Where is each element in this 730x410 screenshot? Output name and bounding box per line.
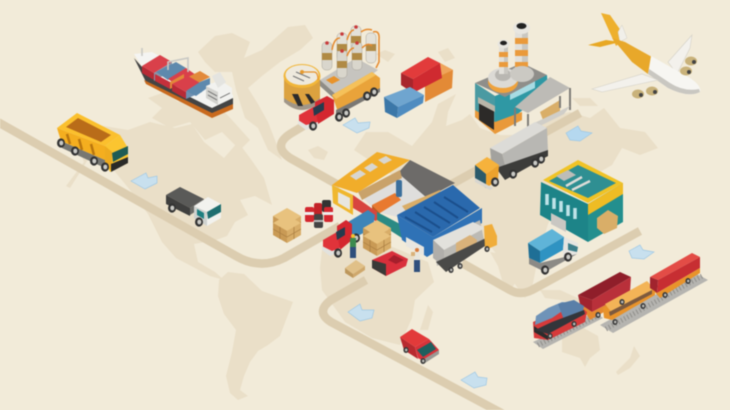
tanker wheels [309, 121, 317, 131]
map: australia [562, 326, 600, 367]
small chimney [499, 46, 508, 74]
road: south east loop [462, 231, 640, 293]
warehouse yellow roof [332, 152, 410, 193]
wheels [334, 248, 342, 258]
building pallets [597, 210, 618, 234]
grey box truck [475, 122, 548, 190]
ship containers [142, 55, 172, 73]
building roof [543, 160, 623, 203]
truck wheels [541, 265, 549, 275]
factory windows [510, 80, 535, 100]
warehouse orange bay [372, 193, 401, 213]
road: west diagonal [0, 121, 340, 264]
trailer end [433, 240, 444, 267]
blue container [384, 87, 424, 107]
blue container body [528, 229, 564, 251]
blue marker arrow 6 [461, 372, 487, 388]
red open wagon [578, 272, 631, 300]
warehouse yellow wall [332, 185, 353, 215]
tank lid [284, 64, 320, 88]
van wheels [403, 347, 409, 353]
blue marker arrow 2 [343, 118, 370, 133]
factory pallets [540, 100, 560, 120]
warehouse open dark roof [398, 160, 455, 198]
building stacked goods [551, 213, 566, 232]
warehouse blue wall [397, 208, 482, 257]
van windows [417, 342, 436, 357]
red truck with blue container at warehouse [322, 210, 375, 258]
truck cab [194, 197, 221, 226]
truck cab and bed [563, 237, 578, 262]
oil storage tank [284, 64, 320, 110]
factory walls [475, 83, 495, 132]
warehouse red wall [353, 195, 377, 222]
dump truck chassis [61, 141, 105, 168]
plane far wing [668, 35, 692, 74]
map: new zealand [616, 346, 640, 375]
factory orange base [475, 110, 522, 134]
dump truck bed [57, 113, 120, 146]
red and black barrels [305, 200, 333, 228]
world map [66, 25, 658, 400]
trailer interior [433, 220, 484, 266]
wheels [448, 267, 454, 273]
factory domes [488, 71, 518, 93]
truck wheels [491, 177, 499, 187]
red cab [337, 220, 352, 250]
second worker [411, 248, 420, 272]
factory [475, 22, 570, 134]
truck cab [475, 157, 499, 174]
red car with boxes [372, 251, 408, 276]
pallets of boxes left [273, 208, 301, 243]
ship superstructure [206, 80, 232, 105]
boxes in trailer [456, 235, 477, 257]
blue marker arrow 1 [131, 173, 157, 189]
tank body [284, 76, 320, 108]
red container wagon [650, 253, 700, 280]
road: south loop [323, 280, 505, 410]
trailer roof [433, 222, 485, 250]
worker in warehouse [396, 180, 402, 197]
truck trailer [490, 122, 547, 154]
blue marker arrow 4 [629, 245, 654, 259]
building left wall [540, 182, 588, 242]
map: africa [320, 240, 434, 345]
steam locomotive [533, 302, 587, 340]
train wheels [547, 333, 553, 339]
road: east diagonal [452, 113, 580, 184]
refinery columns and platform [320, 25, 379, 104]
warehouse stacked shelves [358, 170, 402, 200]
tanker cab [315, 96, 334, 124]
blue marker arrow 5 [348, 304, 374, 321]
blue cargo [348, 210, 375, 240]
warehouse teal wall [377, 212, 402, 238]
ship hull [134, 58, 233, 115]
orange container [425, 63, 453, 102]
map: canadian islands [148, 92, 250, 150]
truck wheels [168, 203, 176, 213]
map: madagascar [420, 305, 433, 330]
open box truck at warehouse [433, 220, 497, 273]
factory dock door [479, 102, 494, 130]
airplane [588, 13, 700, 98]
warehouse blue roof [397, 185, 480, 237]
track right [600, 273, 708, 333]
tanker body [332, 72, 380, 112]
refinery pipes [332, 29, 379, 68]
building right wall [588, 183, 623, 242]
large chimney [515, 32, 528, 70]
map: south america [218, 272, 293, 400]
map: europe and asia [354, 94, 658, 298]
blue marker arrow 3 [566, 126, 592, 141]
factory roof [475, 63, 547, 97]
refinery back columns [322, 26, 376, 78]
teal warehouse building [540, 160, 623, 242]
plane near wing [592, 74, 658, 92]
container ship [134, 48, 233, 118]
van bumper [424, 350, 439, 363]
track left [533, 312, 603, 349]
refinery platform [320, 58, 378, 98]
loading canopy [515, 77, 570, 113]
central warehouse [332, 152, 482, 257]
map: japan and pacific islands [540, 290, 585, 306]
dump truck cab [105, 135, 128, 172]
white flatbed truck [166, 187, 221, 227]
plane tail [601, 13, 626, 46]
shipping roads [0, 113, 640, 410]
tanker truck [298, 72, 380, 131]
ship cranes [142, 48, 188, 72]
orange cab [484, 224, 497, 250]
plane fuselage [612, 38, 652, 74]
road: north loop [281, 125, 340, 186]
map: india and southeast asia [490, 252, 520, 288]
shipping containers [384, 57, 453, 118]
refinery column bands [322, 36, 376, 68]
map: small isle [308, 146, 328, 160]
dump truck wheels [57, 138, 65, 148]
map: greenland and arctic [198, 25, 313, 160]
plane engines [685, 56, 697, 66]
warehouse floor [360, 172, 440, 218]
flatbed cargo [166, 187, 204, 208]
parcels on ground [345, 260, 365, 278]
orange diesel locomotive [603, 282, 655, 320]
map: north america [66, 122, 272, 280]
red delivery van [400, 329, 439, 364]
central pallets of boxes [363, 220, 391, 256]
railway with trains [533, 253, 708, 349]
worker with parcel [350, 234, 356, 258]
blue container truck [528, 229, 578, 275]
dump truck [57, 113, 128, 172]
red container [401, 57, 440, 79]
